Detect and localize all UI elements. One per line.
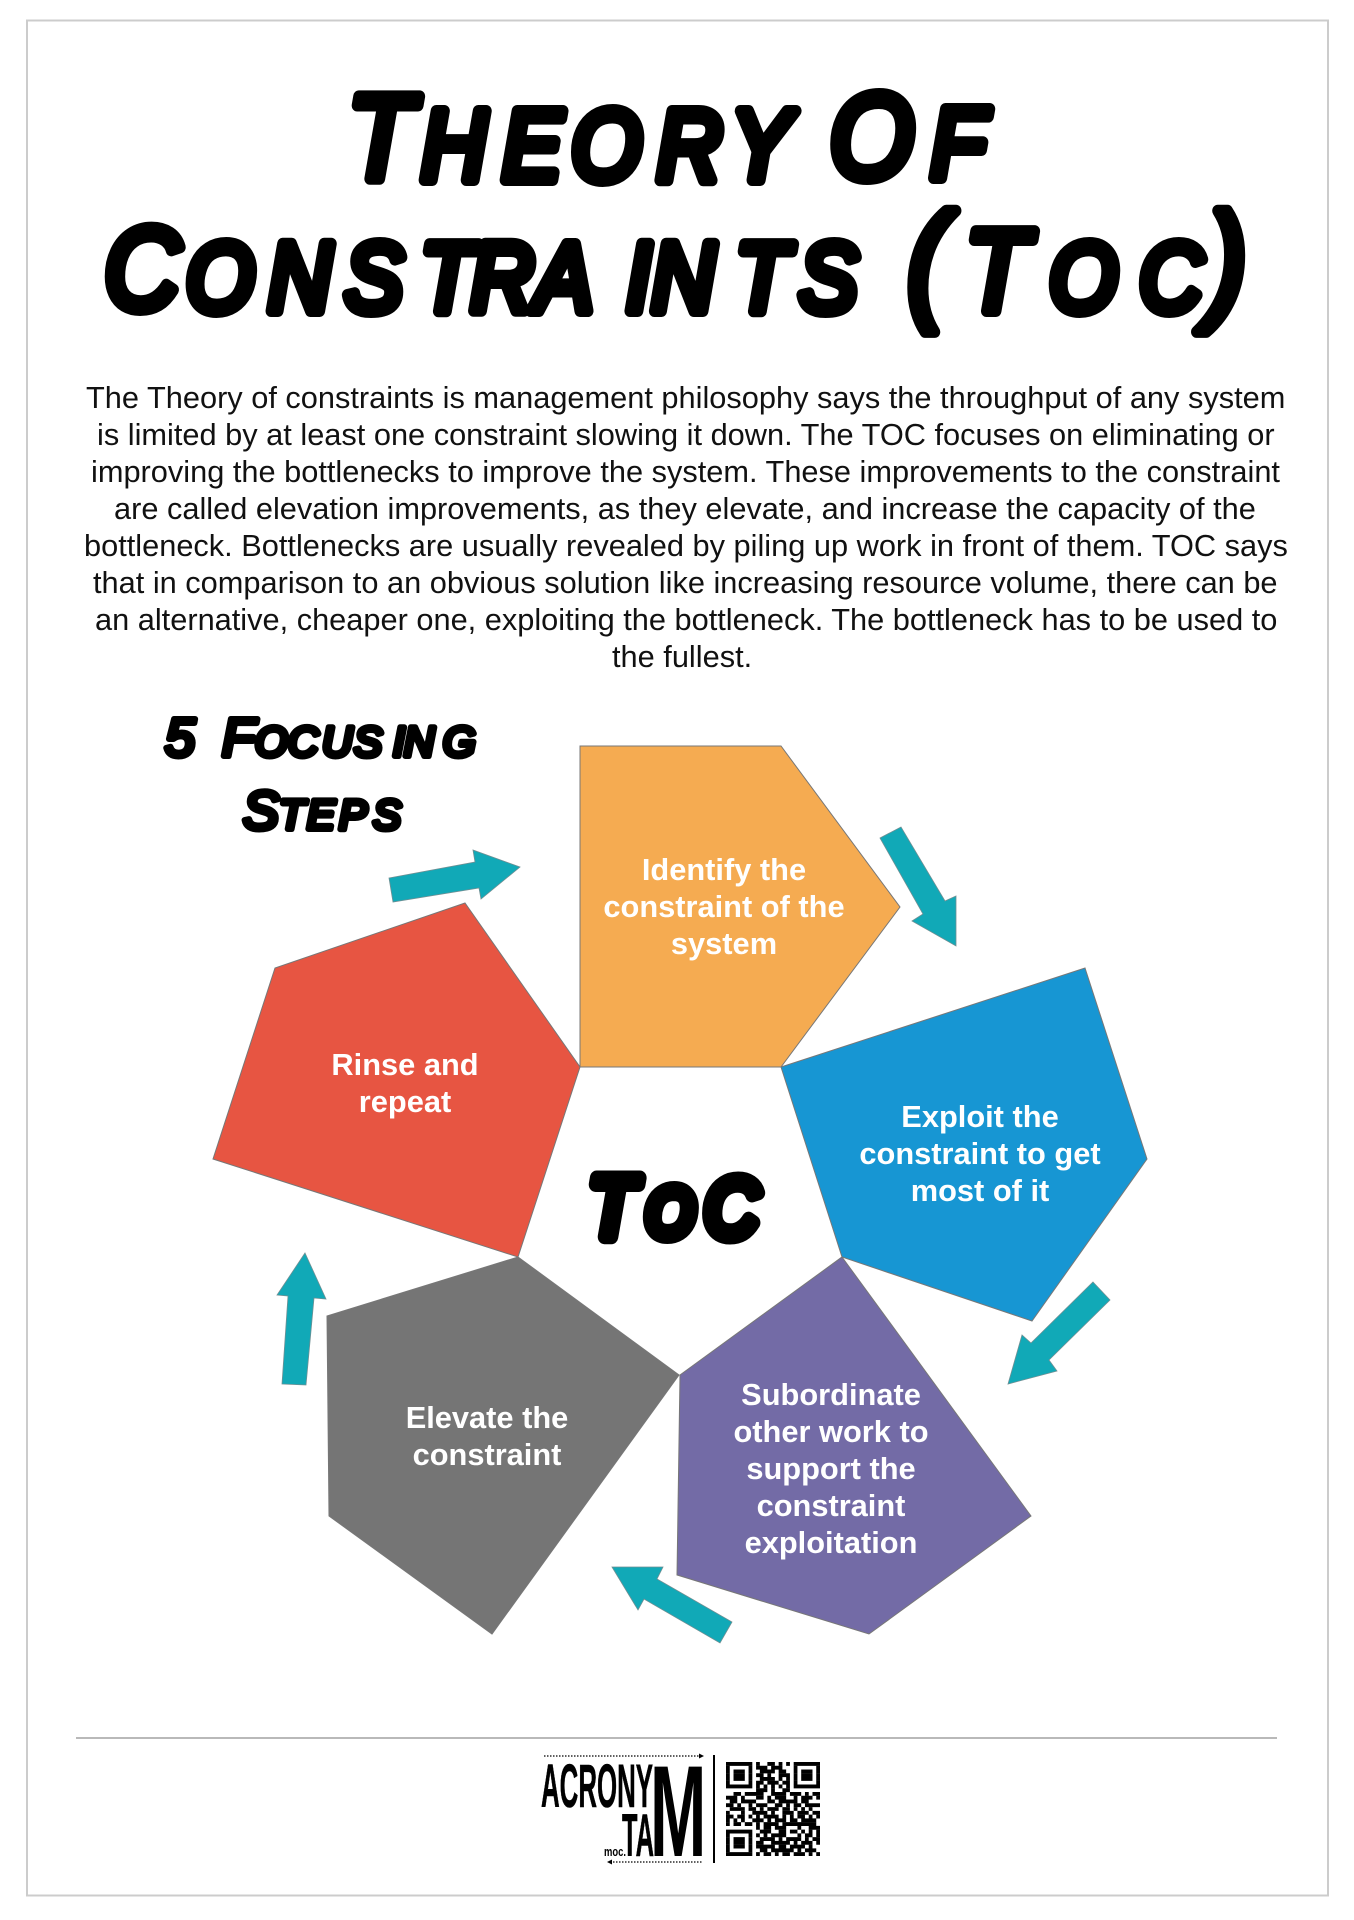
step 5: rinse and repeat: repeat: [359, 1084, 451, 1119]
title: T: [965, 207, 1035, 336]
title: O: [830, 71, 914, 204]
intro paragraph: that in comparison to an obvious solution like increasing resource volume, there can be: [93, 565, 1278, 600]
step 3: subordinate other work: Subordinate: [741, 1377, 921, 1412]
footer QR code: [726, 1764, 820, 1854]
intro paragraph: improving the bottlenecks to improve the system. These improvements to the constraint: [91, 454, 1280, 489]
title: (: [907, 188, 956, 333]
step 2: exploit the constraint: most of it: [911, 1173, 1049, 1208]
step 2: exploit the constraint: [781, 968, 1147, 1321]
title: F: [931, 89, 990, 200]
intro paragraph: The Theory of constraints is management philosophy says the throughput of any system: [86, 380, 1285, 415]
heading: 5 focusing steps: [165, 708, 476, 841]
footer logo: acronym tam: ACRONY: [541, 1752, 653, 1820]
footer logo: acronym tam: TA: [622, 1802, 654, 1869]
intro paragraph: [84, 380, 1288, 674]
step 1: identify the constraint: system: [671, 926, 777, 961]
step 2: exploit the constraint: Exploit the: [901, 1099, 1059, 1134]
arrow: step 3 to step 4: [612, 1567, 732, 1643]
footer logo: acronym tam: M: [650, 1738, 706, 1884]
step 3: subordinate other work: [677, 1257, 1031, 1634]
step 5: rinse and repeat: Rinse and: [331, 1047, 479, 1082]
footer logo: acronym tam: moc.: [604, 1844, 626, 1859]
intro paragraph: is limited by at least one constraint slowing it down. The TOC focuses on eliminating or: [97, 417, 1275, 452]
step 3: subordinate other work: support the: [746, 1451, 916, 1486]
intro paragraph: an alternative, cheaper one, exploiting the bottleneck. The bottleneck has to be used to: [95, 602, 1277, 637]
title: HEORY: [421, 91, 797, 202]
title: C: [104, 205, 181, 334]
step 3: subordinate other work: constraint: [757, 1488, 905, 1523]
title: T: [347, 72, 420, 205]
step 1: identify the constraint: [580, 746, 900, 1067]
step 3: subordinate other work: other work to: [733, 1414, 929, 1449]
footer logo: acronym tam: [541, 1738, 715, 1884]
title: ONSTRAINTS: [186, 223, 857, 332]
heading: 5 focusing steps: F: [222, 708, 258, 768]
arrow: step 5 to step 1: [389, 850, 520, 902]
center label: TOC: C: [705, 1161, 759, 1254]
heading: 5 focusing steps: S: [243, 781, 279, 841]
arrow: step 2 to step 3: [1008, 1282, 1110, 1384]
step 2: exploit the constraint: constraint to get: [859, 1136, 1101, 1171]
intro paragraph: are called elevation improvements, as they elevate, and increase the capacity of the: [114, 491, 1256, 526]
center label: TOC: O: [646, 1174, 694, 1251]
heading: 5 focusing steps: OCUSING: [255, 718, 476, 765]
center label: TOC: T: [589, 1161, 641, 1256]
heading: 5 focusing steps: TEPS: [279, 791, 401, 838]
step 1: identify the constraint: Identify the: [642, 852, 806, 887]
footer divider: [76, 1737, 1277, 1739]
step 3: subordinate other work: exploitation: [745, 1525, 917, 1560]
heading: 5 focusing steps: 5: [165, 708, 196, 768]
step 4: elevate the constraint: Elevate the: [406, 1400, 568, 1435]
arrow: step 1 to step 2: [880, 827, 956, 946]
step 5: rinse and repeat: [213, 903, 580, 1257]
arrow: step 4 to step 5: [277, 1253, 326, 1385]
step 4: elevate the constraint: [327, 1257, 679, 1634]
title: OC: [1049, 223, 1204, 332]
intro paragraph: bottleneck. Bottlenecks are usually revealed by piling up work in front of them. TOC says: [84, 528, 1288, 563]
step 4: elevate the constraint: constraint: [413, 1437, 561, 1472]
intro paragraph: the fullest.: [612, 639, 752, 674]
title: ): [1196, 188, 1247, 333]
title: [104, 71, 1247, 336]
step 1: identify the constraint: constraint of the: [603, 889, 845, 924]
